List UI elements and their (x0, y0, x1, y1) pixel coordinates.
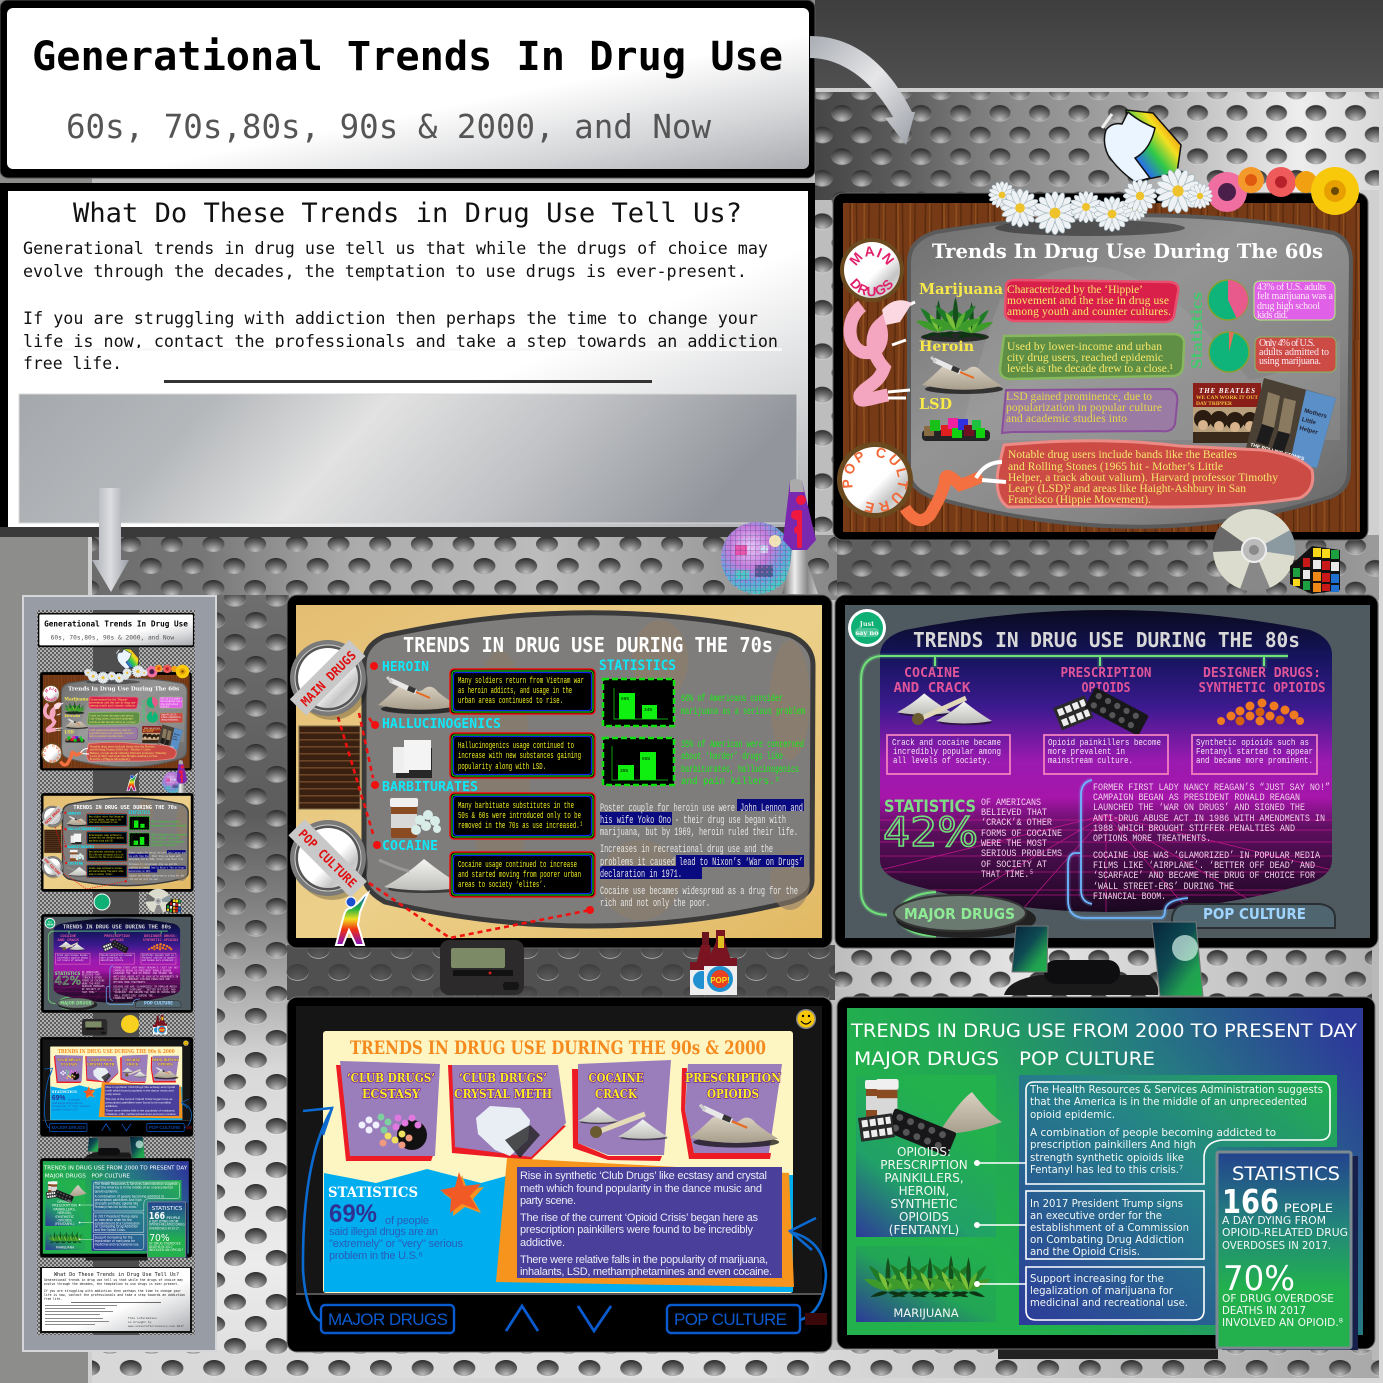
card: crystal meth: ‘CLUB DRUGS’ (459, 1070, 547, 1085)
pop culture text: FINANCIAL BOOM. (1093, 892, 1166, 903)
pop culture text box: There were relative falls in the popularity of marijuana, (520, 1254, 768, 1266)
body text: free life. (23, 354, 122, 374)
mini closing panel: evolve through the decades, the temptation to use drugs is ever-present. (44, 1282, 179, 1286)
mini closing panel: Generational trends in drug use tell us that while the drugs of choice may (44, 1278, 183, 1282)
pop culture text: OPTIONS MORE TREATMENTS. (1093, 834, 1211, 845)
icon: LSD tabs (922, 418, 990, 441)
pop culture text box (496, 1158, 794, 1287)
dashed connectors (338, 713, 590, 938)
heading: 2000 title: TRENDS IN DRUG USE FROM 2000 TO PRESENT DAY (850, 1020, 1357, 1042)
text box: opioids (1044, 735, 1168, 774)
decoration: pop bottles (690, 930, 737, 995)
wooden board (299, 726, 360, 809)
statistic text: SERIOUS PROBLEMS (981, 849, 1062, 860)
text box: legalization (1026, 1267, 1204, 1320)
heading: 60s title: Trends In Drug Use During The 60s (932, 239, 1323, 263)
statistic text: FORMS OF COCAINE (981, 829, 1062, 840)
stat text: 35 percent: barbiturates, hallucinogenics (681, 764, 799, 776)
text box: cocaine: areas to society ‘elites’. (458, 879, 546, 890)
text box: opioid epidemic: A combination of people becoming addicted to (1030, 1126, 1276, 1139)
box: opioids (856, 1075, 1002, 1237)
stat box: 4 percent: using marijuana. (1259, 356, 1321, 367)
mini closing panel: If you are struggling with addiction then perhaps the time to change your (44, 1289, 181, 1293)
album: The Beatles: WE CAN WORK IT OUT (1196, 395, 1258, 401)
text box: barbiturates: removed in the 70s as use increased.¹ (458, 820, 583, 831)
body text: If you are struggling with addiction then perhaps the time to change your (23, 309, 758, 329)
panel: main title (0, 0, 815, 178)
pie chart: 4 percent (1209, 332, 1249, 372)
icon: cocaine and pipe (897, 693, 992, 725)
pop culture text box: prescription painkillers were found to be incredibly (520, 1224, 754, 1236)
statistics: 42 percent: 42% (883, 810, 978, 856)
album: The Beatles: THE BEATLES (1199, 387, 1255, 395)
text box: opioid epidemic: strength synthetic opioids like (1030, 1151, 1184, 1164)
text: statistics vertical: Statistics (1188, 292, 1206, 369)
text box: opioids: Opioid painkillers become (1048, 738, 1161, 748)
decoration: pop bottles: POP! (710, 976, 730, 985)
label: pop culture (1172, 904, 1335, 928)
text box: barbiturates: 50s & 60s were introduced only to be (458, 810, 581, 821)
text blob: heroin: city drug users, reached epidemic (1007, 352, 1163, 364)
panel: statistics: PEOPLE (1284, 1201, 1333, 1215)
icon: marijuana row (864, 1255, 991, 1297)
mini closing panel: free life. (44, 1297, 62, 1301)
panel: statistics: A DAY DYING FROM (1222, 1214, 1326, 1227)
text box: cocaine: Cocaine usage continued to increase (458, 859, 577, 870)
smiley (796, 1009, 816, 1029)
mini closing panel: This information (128, 1316, 157, 1320)
icon: heroin pile (378, 677, 459, 714)
stat text: 66 percent: marijuana as a serious problem (681, 706, 805, 718)
panel: statistics: OF DRUG OVERDOSE (1222, 1292, 1334, 1305)
card: crystal meth: CRYSTAL METH (454, 1086, 552, 1101)
text blob: hippie movement: Characterized by the ‘Hippie’ (1007, 284, 1143, 296)
box: opioids: SYNTHETIC (890, 1197, 958, 1211)
panel: miniature overview of the poster (23, 596, 216, 1351)
text box: hallucinogenics: Hallucinogenics usage continued to (458, 740, 574, 751)
headings: drugs (382, 658, 676, 854)
text blob: pop culture: Francisco (Hippie Movement). (1008, 494, 1151, 506)
button: major drugs: MAJOR DRUGS (328, 1310, 448, 1329)
statistic: 69 percent: problem in the U.S.⁶ (329, 1250, 423, 1262)
badge: just say no: say no (856, 629, 879, 637)
heading: LSD: LSD (919, 395, 952, 413)
statistic text: OF AMERICANS (981, 798, 1041, 809)
heading: marijuana: Marijuana (919, 280, 1003, 298)
button: pop culture (667, 1305, 800, 1333)
card: ecstasy: ‘CLUB DRUGS’ (347, 1070, 435, 1085)
connector dots (370, 662, 594, 914)
badge: pop culture: POP CULTURE (295, 826, 360, 891)
connector lines (974, 1160, 1026, 1286)
text blob: hippie movement: movement and the rise in drug use (1007, 295, 1169, 307)
text box: cocaine (450, 852, 595, 897)
heading: 90s title: TRENDS IN DRUG USE DURING THE 90s & 2000 (350, 1037, 766, 1059)
label: pop culture: POP CULTURE (1203, 905, 1306, 923)
pop culture text: ‘SCARFACE’ AND BECAME THE DRUG OF CHOICE FOR (1093, 870, 1315, 882)
card: crystal meth (448, 1065, 566, 1160)
heading: 80s title: TRENDS IN DRUG USE DURING THE 80s (913, 628, 1300, 652)
text blob: heroin: Used by lower-income and urban (1007, 341, 1162, 353)
text box: opioid epidemic: prescription painkillers And high (1030, 1138, 1196, 1151)
album: Rolling Stones (1246, 378, 1336, 468)
statistic text: BELIEVED THAT (981, 808, 1047, 819)
panel: 1960s trends (832, 109, 1368, 540)
box: opioids: OPIOIDS: (897, 1145, 951, 1159)
statistics heading: STATISTICS (328, 1185, 418, 1201)
text box: cocaine: all levels of society. (893, 756, 991, 766)
arrow: pop culture (790, 1218, 826, 1320)
body text (20, 239, 782, 374)
headings: drug columns: OPIOIDS (1082, 681, 1131, 696)
stat box: 4 percent: Only 4% of U.S. (1259, 338, 1315, 349)
text box: opioids: more prevalent in (1048, 747, 1125, 757)
badge: main drugs: DRUGS (850, 278, 893, 296)
mini closing panel: www.scientificrecovery.com 2017 (128, 1324, 184, 1328)
mini closing panel: What Do These Trends in Drug Use Tell Us? (54, 1272, 179, 1278)
arrow: down chevron (578, 1306, 611, 1331)
pop culture text: LAUNCHED THE ‘WAR ON DRUGS’ AND SIGNED THE (1093, 802, 1305, 814)
text box: legalization: Support increasing for the (1030, 1272, 1164, 1285)
pop culture text box: addictive. (520, 1237, 565, 1249)
text blob: pop culture: and Rolling Stones (1965 hit - Mother’s Little (1008, 461, 1223, 473)
album: The Beatles: DAY TRIPPER (1196, 401, 1233, 407)
headings: drug columns (894, 666, 1326, 696)
text box: legalization: legalization of marijuana for (1030, 1284, 1173, 1297)
panel: what do these trends tell us (0, 183, 815, 537)
decoration: daisies and roses (988, 167, 1359, 236)
statistic text: OF SOCIETY AT (981, 860, 1047, 871)
decoration: disco ball (721, 522, 793, 594)
icon: orange star (440, 1172, 484, 1216)
text box: hallucinogenics (450, 733, 595, 778)
label: major drugs (894, 895, 1036, 938)
text box: opioid epidemic (1026, 1082, 1330, 1184)
badge: just say no (848, 609, 886, 647)
stat text: 66 percent (681, 693, 805, 718)
pop culture text: ANTI-DRUG ABUSE ACT IN 1986 WITH AMENDMENTS IN (1093, 814, 1325, 825)
box: opioids: OPIOIDS (899, 1210, 949, 1224)
box: opioids: HEROIN, (899, 1184, 949, 1198)
text box: opioid epidemic: Fentanyl has led to this crisis.⁷ (1030, 1163, 1183, 1176)
decoration: pager (440, 940, 524, 995)
album: Rolling Stones: Little (1301, 417, 1317, 427)
panel: statistics: DEATHS IN 2017 (1222, 1304, 1306, 1317)
stat box: 43 percent: kids did. (1257, 310, 1288, 321)
text box: executive order: an executive order for the (1030, 1209, 1162, 1222)
bar chart: harder drugs: 35% (620, 768, 628, 774)
heading: heroin: Heroin (919, 339, 974, 355)
text box: executive order: and the Opioid Crisis. (1030, 1245, 1140, 1258)
text box: barbiturates (450, 793, 595, 839)
text blob: hippie movement (1005, 280, 1178, 322)
album: The Beatles (1193, 383, 1261, 443)
text box: heroin: Many soldiers return from Vietnam war (458, 675, 584, 686)
neon connector: major drugs (861, 656, 1288, 936)
panel: statistics (1217, 1152, 1358, 1350)
button: pop culture: POP CULTURE (674, 1310, 787, 1329)
arrow: title to 60s panel (810, 36, 915, 145)
subtitle: 60s, 70s,80s, 90s & 2000, and Now (66, 107, 711, 146)
icon: blister packs (1053, 687, 1149, 736)
pop culture text box: The rise of the current ‘Opioid Crisis’ began here as (520, 1212, 758, 1224)
panel: statistics: INVOLVED AN OPIOID.⁸ (1222, 1316, 1344, 1329)
pop culture text: declaration in 1971. (600, 869, 682, 881)
headings: drug columns: PRESCRIPTION (1060, 666, 1152, 681)
box: pop culture (1019, 1075, 1337, 1325)
album: Rolling Stones: Helper (1299, 426, 1319, 436)
panel: 2000 to present: POP CULTURE (1019, 1048, 1155, 1070)
mini closing panel (40, 1267, 192, 1333)
statistic: 69 percent: "extremely" or "very" serious (329, 1238, 464, 1250)
pop culture text: 1988 WHICH BROUGHT STIFFER PENALTIES AND (1093, 824, 1295, 835)
text blob: heroin (1000, 334, 1184, 379)
text blob: heroin: levels as the decade drew to a close.¹ (1007, 363, 1174, 375)
panel: 1980s trends (835, 595, 1378, 948)
text blob: pop culture: Notable drug users include bands like the Beatles (1008, 449, 1238, 461)
label: major drugs: MAJOR DRUGS (904, 905, 1015, 923)
mini closing panel: life is now, contact the professionals and take a step towards an addiction (44, 1293, 185, 1297)
text box: executive order: on Combating Drug Addiction (1030, 1233, 1184, 1246)
badge: just say no: Just (859, 620, 874, 628)
grey reference box (19, 394, 797, 523)
text box: cocaine (887, 735, 1010, 774)
bar chart: marijuana: 66% (621, 696, 629, 702)
pop culture text: - their drug use began with (675, 815, 786, 827)
stat box: 4 percent (1255, 337, 1336, 372)
text box: heroin: urban areas continuesd to rise. (458, 695, 563, 706)
text box: heroin: as heroin addicts, and usage in the (458, 685, 572, 696)
text blob: hippie movement: among youth and counter cultures. (1007, 306, 1171, 318)
text box: executive order (1026, 1191, 1204, 1259)
statistic text: WERE THE MOST (981, 839, 1047, 850)
icon: cocaine pile (379, 859, 464, 893)
arrow: down to thumbnail (92, 488, 129, 592)
text box: cocaine: incredibly popular among (893, 747, 1001, 757)
pop culture text box: inhalants, LSD, methamphetamines and even cocaine. (520, 1266, 772, 1278)
text blob: LSD: LSD gained prominence, due to (1006, 391, 1152, 403)
heading: what do these trends: What Do These Trends in Drug Use Tell Us? (73, 198, 742, 229)
card: prescription opioids: PRESCRIPTION (685, 1070, 781, 1085)
statistic text (981, 798, 1062, 881)
arrow: major drugs (303, 1108, 332, 1321)
pie chart: 43 percent (1208, 280, 1248, 320)
body text: life is now, contact the professionals and take a step towards an addiction (23, 332, 778, 352)
text box: synthetic: Synthetic opioids such as (1196, 738, 1309, 748)
stat box: 43 percent: drug high school (1257, 301, 1320, 312)
headings: drugs: HALLUCINOGENICS (382, 717, 501, 732)
stat text: 35 percent: 35% of American were concerned (681, 739, 804, 751)
pop culture text box: Rise in synthetic ‘Club Drugs’ like ecstasy and crystal (520, 1170, 767, 1182)
box: marijuana (856, 1246, 996, 1322)
pop culture text: Increases in recreational drug use and the (600, 844, 773, 856)
stat text: 66 percent: 66% of Americans consider (681, 693, 783, 705)
headings: drugs: COCAINE (382, 839, 438, 854)
bar chart: marijuana (603, 679, 674, 726)
text blob: LSD: popularization in popular culture (1006, 402, 1162, 414)
pop culture text: COCAINE USE WAS ‘GLAMORIZED’ IN POPULAR MEDIA (1093, 850, 1320, 862)
bar chart: harder drugs (603, 738, 674, 785)
stat box: 43 percent: felt marijuana was a (1257, 291, 1334, 302)
badge: main drugs (840, 238, 904, 302)
headings: drug columns: DESIGNER DRUGS: (1203, 666, 1321, 681)
album: Rolling Stones: Mothers (1303, 408, 1328, 420)
card: ecstasy (336, 1061, 440, 1161)
icon: white bags (393, 740, 432, 778)
badge: pop culture: POP CULTURE (842, 448, 908, 513)
stat text: 35 percent (681, 739, 804, 788)
headings: drugs: HEROIN (382, 660, 429, 675)
box: opioids: PAINKILLERS, (884, 1171, 964, 1185)
stat box: 43 percent (1254, 281, 1335, 321)
heading: 70s title: TRENDS IN DRUG USE DURING THE 70s (403, 633, 773, 657)
text box: opioid epidemic: opioid epidemic. (1030, 1108, 1115, 1121)
statistic text: ‘CRACK’& OTHER (981, 817, 1052, 829)
text box: barbiturates: Many barbituate substitutes in the (458, 800, 574, 811)
text blob: pop culture: Helper, a track about valium). Harvard professor Timothy (1008, 472, 1278, 484)
heading: main title: Generational Trends In Drug Use (32, 34, 783, 80)
card: cocaine crack: COCAINE (588, 1070, 644, 1085)
pop culture text (600, 799, 804, 910)
badge: main drugs: MAIN DRUGS (298, 648, 359, 709)
pop culture text: rich and not only the poor. (600, 898, 710, 910)
statistic: 69 percent: said illegal drugs are an (329, 1226, 438, 1238)
button: major drugs (321, 1305, 454, 1333)
icon: heroin pile (922, 357, 1003, 394)
text box: hallucinogenics: increase with new substances gaining (458, 750, 581, 761)
text box: heroin (450, 669, 595, 714)
arm: pink pointing hands (850, 300, 915, 400)
text box: synthetic (1192, 735, 1317, 774)
text blob: LSD (1002, 389, 1177, 433)
body text: Generational trends in drug use tell us that while the drugs of choice may (23, 239, 768, 259)
icon: orange pills (1217, 698, 1304, 726)
badge: main drugs (290, 640, 368, 720)
pop culture text (1093, 782, 1330, 903)
icon: pill bottles (390, 798, 441, 838)
panel: statistics: 166 (1222, 1182, 1279, 1221)
pop culture text: CAMPAIGN BEGAN AS PRESIDENT RONALD REAGAN (1093, 793, 1300, 804)
panel: statistics: OPIOID-RELATED DRUG (1222, 1226, 1348, 1239)
text blob: LSD: and academic studies into (1006, 413, 1127, 425)
panel: 1990s and 2000 trends (287, 997, 832, 1352)
headings: drug columns: AND CRACK (894, 681, 971, 696)
headings: drug columns: COCAINE (904, 666, 960, 681)
text box: synthetic: Fentanyl started to appear (1196, 747, 1313, 757)
pop culture text: FILMS LIKE ‘AIRPLANE’. ‘BETTER OFF DEAD’ AND (1093, 860, 1315, 872)
bar chart: harder drugs: 65% (642, 756, 650, 762)
headings: drugs: BARBITURATES (382, 780, 478, 795)
icon: pills and bottles (858, 1079, 1002, 1156)
stat text: 35 percent: and pain killers.² (681, 776, 780, 788)
neon connector: pop culture (1068, 780, 1188, 918)
headings: drug columns: SYNTHETIC OPIOIDS (1198, 681, 1326, 696)
pop culture text: Poster couple for heroin use were (600, 803, 735, 815)
panel: statistics: 70% (1223, 1259, 1295, 1299)
text blob: pop culture (997, 441, 1313, 507)
mini closing panel: is brought by (128, 1320, 152, 1324)
panel: 1970s trends (287, 595, 832, 948)
card: cocaine crack: CRACK (595, 1086, 638, 1101)
card: ecstasy: ECSTASY (362, 1086, 421, 1101)
decoration: peace dove with rainbow (1102, 110, 1181, 182)
decoration: rainbow dancer (336, 893, 368, 945)
text box: cocaine: and started moving from poorer urban (458, 869, 581, 880)
card: cocaine crack (572, 1060, 671, 1161)
pop culture text: Cocaine use becames widespread as a drug for the (600, 886, 798, 898)
decoration: mobile phones and stand (1004, 922, 1203, 996)
body text: evolve through the decades, the temptation to use drugs is ever-present. (23, 262, 747, 282)
headings: drugs: STATISTICS (599, 658, 676, 674)
panel: 2000 to present (837, 997, 1375, 1359)
synthwave screen (880, 610, 1332, 912)
pop culture text box: party scene. (520, 1195, 576, 1207)
pop culture text: John Lennon and (740, 803, 803, 815)
text box: synthetic: and became more prominent. (1196, 756, 1313, 766)
box: opioids: PRESCRIPTION (880, 1158, 968, 1172)
text blob: pop culture: Leary (LSD)² and areas like Haight-Ashbury in San (1008, 483, 1246, 495)
text box: opioid epidemic: that the America is in the middle of an unprecedented (1030, 1095, 1307, 1108)
pop culture text box: meth which found popularity in the dance music and (520, 1183, 762, 1195)
card: prescription opioids (681, 1064, 782, 1159)
statistic: 69 percent (329, 1200, 464, 1262)
statistic text: THAT TIME.⁵ (981, 870, 1034, 881)
text box: hallucinogenics: popularity along with LSD. (458, 761, 546, 772)
statistic: 69 percent: of people (385, 1215, 429, 1227)
bar chart: marijuana: 34% (644, 707, 652, 713)
decoration: CD (1213, 509, 1295, 591)
statistics: 42 percent: STATISTICS (884, 797, 976, 817)
pop culture text: FORMER FIRST LADY NANCY REAGAN’S “JUST SAY NO!” (1093, 782, 1330, 794)
badge: main drugs: MAIN (849, 246, 894, 266)
arrow: up chevron (506, 1306, 538, 1331)
album: Rolling Stones: THE ROLLING STONES (1249, 442, 1306, 463)
stat text: 35 percent: about ‘harder’ drugs like (681, 751, 783, 763)
pop culture text: marijuana, but by 1969, heroin ruled their life. (600, 827, 798, 839)
icon: marijuana (916, 297, 993, 342)
text box: executive order: In 2017 President Trump signs (1030, 1197, 1183, 1210)
panel: statistics: OVERDOSES IN 2017. (1222, 1239, 1331, 1252)
box: marijuana: MARIJUANA (893, 1306, 959, 1320)
retro screen (364, 613, 813, 926)
decoration: rubik's cube (1290, 546, 1340, 594)
statistic: 69 percent: 69% (329, 1200, 377, 1228)
box: opioids: (FENTANYL) (889, 1223, 959, 1237)
pop culture text: lead to Nixon’s ‘War on Drugs’ (679, 857, 803, 869)
text box: cocaine: Crack and cocaine became (892, 738, 1001, 748)
stat box: 43 percent: 43% of U.S. adults (1257, 282, 1326, 293)
text box: opioids: mainstream culture. (1048, 756, 1133, 766)
panel: statistics: STATISTICS (1232, 1163, 1340, 1185)
card: prescription opioids: OPIOIDS (707, 1086, 759, 1101)
pop culture text: ‘WALL STREET-ERS’ DURING THE (1093, 881, 1234, 893)
arm: orange pointing (905, 462, 1006, 520)
headings: columns: MAJOR DRUGS (854, 1048, 999, 1070)
text box: opioid epidemic: The Health Resources & Services Administration suggests (1029, 1083, 1323, 1096)
text box: legalization: medicinal and recreational use. (1030, 1296, 1188, 1309)
decoration: lava lamp (782, 479, 818, 594)
stat box: 4 percent: adults admitted to (1259, 347, 1329, 358)
screen background (323, 1031, 793, 1293)
pop culture text: problems it caused (600, 857, 675, 869)
pop culture text: his wife Yoko Ono (600, 815, 671, 827)
text box: executive order: establishment of a Commission (1030, 1221, 1189, 1234)
